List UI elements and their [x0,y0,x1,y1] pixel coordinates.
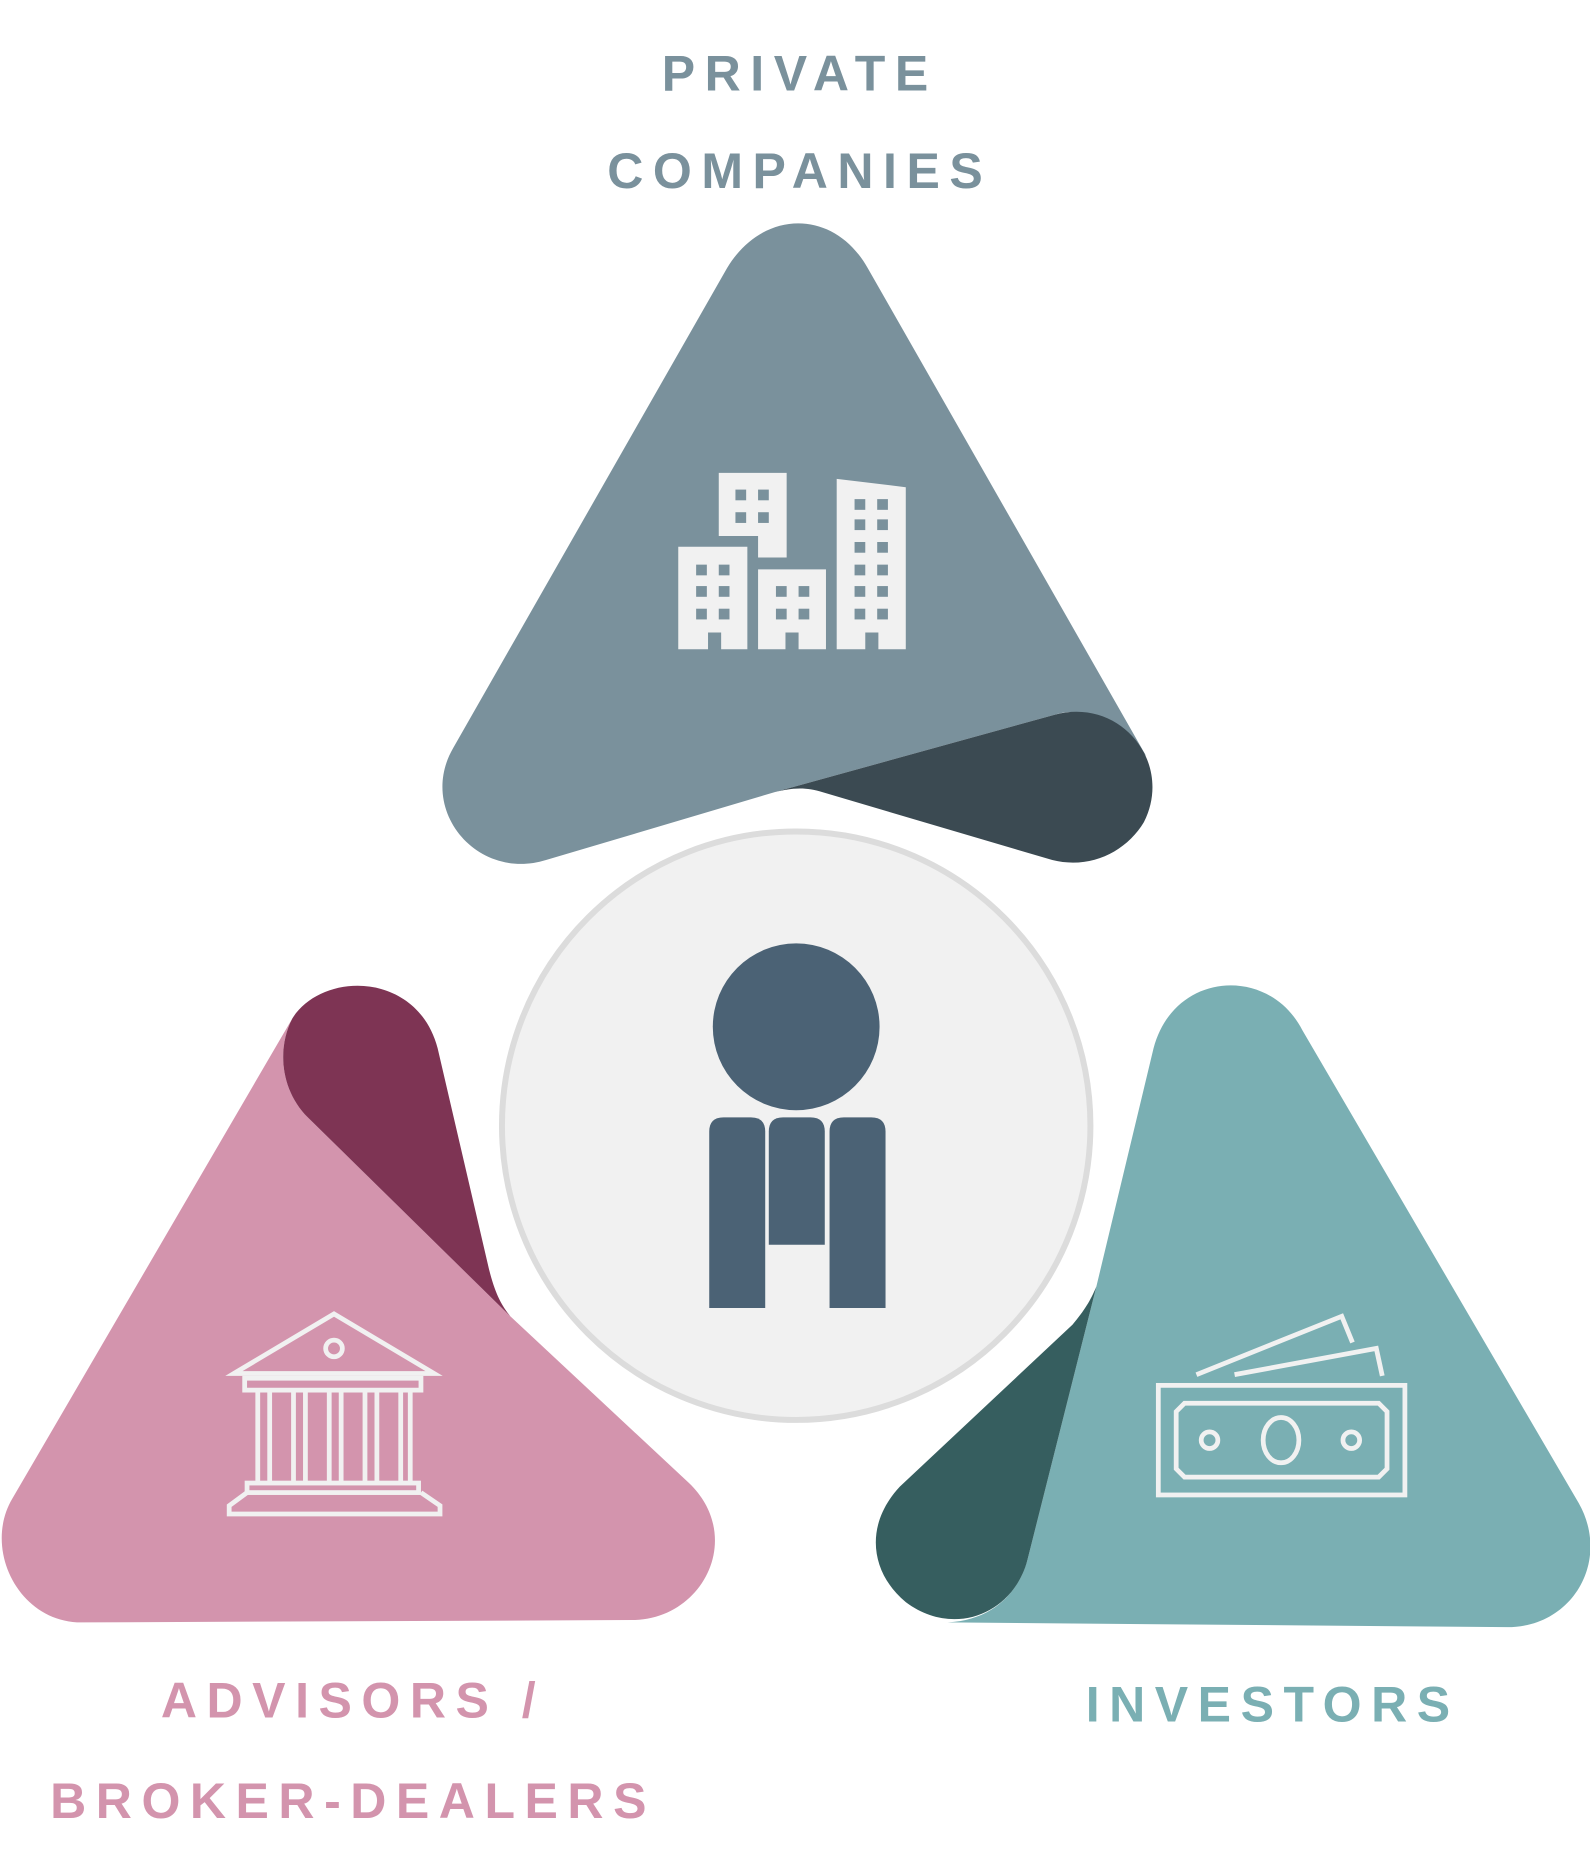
heading: advisors / broker-dealers: ADVISORS / [161,1673,545,1729]
center circle with person [502,831,1090,1420]
icon: buildings [678,473,906,649]
icon: money [1158,1316,1405,1495]
panel: private companies triangle [442,223,1152,864]
panel: investors triangle [876,985,1590,1627]
heading: investors: INVESTORS [1086,1676,1460,1732]
icon: bank [229,1314,440,1514]
panel: advisors triangle [2,986,715,1622]
heading: private companies: COMPANIES [607,143,992,199]
icon: person [709,943,886,1308]
heading: private companies: PRIVATE [662,46,938,102]
heading: advisors / broker-dealers: BROKER-DEALERS [50,1773,656,1829]
heading: private companies [607,46,992,199]
heading: advisors / broker-dealers [50,1673,656,1829]
